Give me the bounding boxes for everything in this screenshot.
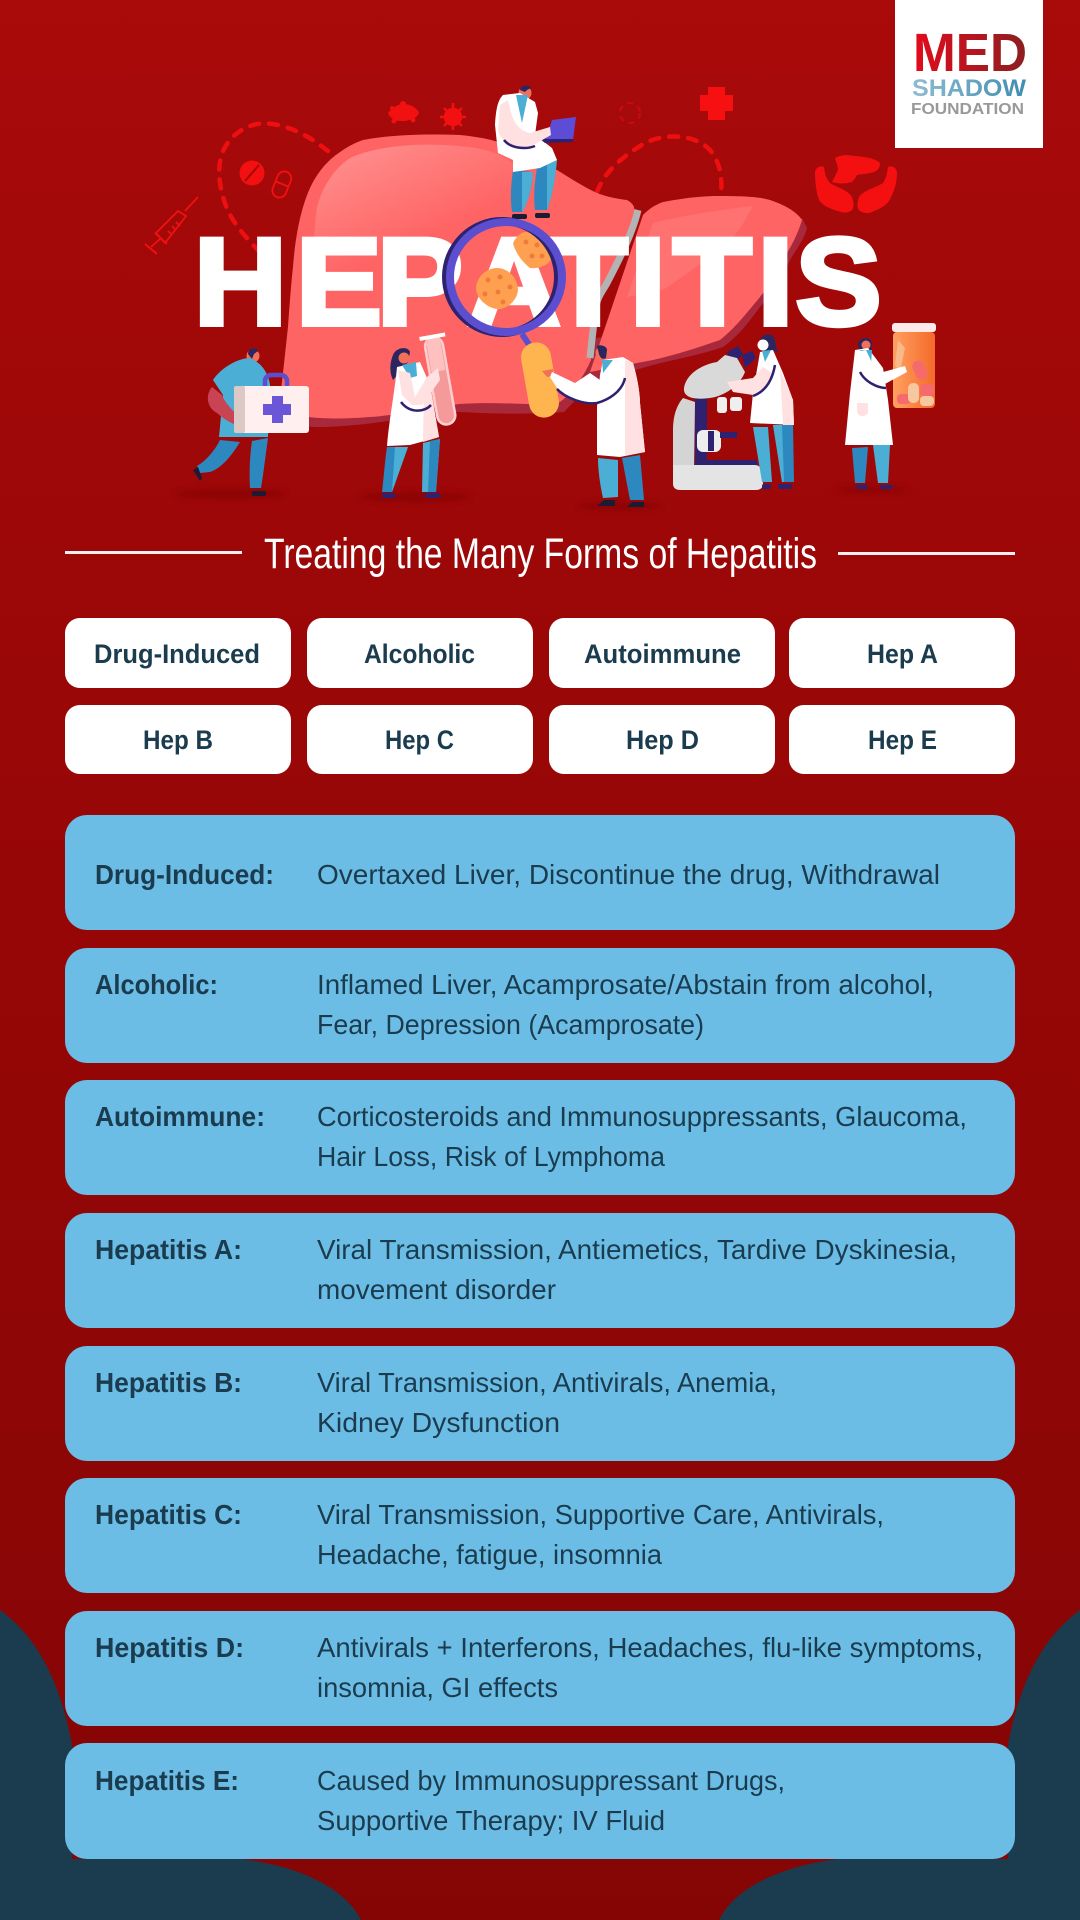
tag: Autoimmune	[549, 618, 775, 688]
panel: Alcoholic	[65, 948, 1015, 1063]
floor shadow	[360, 492, 470, 502]
arm	[673, 398, 695, 470]
liver left lobe	[280, 135, 635, 418]
panel: Hepatitis E: Supportive Therapy; IV Fluid	[317, 1805, 665, 1836]
figure: doctor at microscope	[727, 334, 794, 489]
liver seam	[590, 210, 638, 358]
panel: Drug-Induced: Drug-Induced:	[95, 859, 274, 890]
base	[673, 465, 763, 490]
coat	[387, 362, 439, 446]
panel: Hepatitis A: Hepatitis A:	[95, 1234, 242, 1265]
trousers	[852, 445, 890, 483]
handle stem	[522, 334, 530, 346]
arm back	[695, 398, 757, 466]
panel: Alcoholic: Inflamed Liver, Acamprosate/Abstain from alcohol,	[317, 969, 934, 1000]
shoes	[512, 213, 550, 219]
icon: capsule	[270, 169, 293, 200]
dashed arc right	[597, 137, 721, 198]
heading rule left	[65, 551, 242, 554]
coat	[495, 93, 557, 172]
panel: Hepatitis D: Hepatitis D:	[95, 1632, 244, 1663]
tag: Hep C	[307, 705, 533, 774]
virus cell upper	[513, 232, 552, 268]
panel: Hepatitis D	[65, 1611, 1015, 1726]
panel: Hepatitis C	[65, 1478, 1015, 1593]
laptop	[540, 117, 576, 143]
panel: Hepatitis E: Caused by Immunosuppressant Drugs,	[317, 1765, 785, 1796]
tag grid	[65, 618, 1015, 774]
icon: virus blob	[388, 101, 419, 124]
arm	[856, 350, 907, 388]
collar	[516, 95, 528, 123]
head and hair	[758, 334, 778, 352]
tag: Drug-Induced: Drug-Induced	[94, 639, 260, 669]
figure: doctor with test tube	[360, 332, 470, 502]
shoes	[193, 467, 266, 496]
panel: Hepatitis B: Viral Transmission, Antivirals, Anemia,	[317, 1367, 777, 1398]
arm	[398, 368, 440, 411]
arm	[208, 387, 252, 428]
tag: Hep A: Hep A	[867, 639, 938, 669]
logo: MedShadow Foundation: FOUNDATION	[911, 101, 1024, 118]
icon: tablet	[240, 160, 264, 186]
panel: Hepatitis A: movement disorder	[317, 1274, 556, 1305]
panel: Hepatitis D: Antivirals + Interferons, Headaches, flu-like symptoms,	[317, 1632, 983, 1663]
collar	[762, 350, 771, 362]
panel: Hepatitis A: Viral Transmission, Antiemetics, Tardive Dyskinesia,	[317, 1234, 957, 1265]
tag: Hep E: Hep E	[868, 725, 937, 755]
coat side shade	[423, 385, 439, 442]
lens ring	[450, 222, 562, 332]
trousers	[598, 455, 644, 500]
hand	[542, 369, 553, 377]
panel: Hepatitis C: Viral Transmission, Supportive Care, Antivirals,	[317, 1499, 884, 1530]
logo: MedShadow Foundation: SHADOW	[912, 75, 1026, 102]
panel: Hepatitis B: Kidney Dysfunction	[317, 1407, 560, 1438]
trousers	[382, 439, 440, 492]
kit box	[234, 386, 309, 433]
icon: syringe	[145, 197, 198, 254]
icon: hands holding liver	[815, 155, 897, 213]
panel: Drug-Induced	[65, 815, 1015, 930]
head and hair	[390, 348, 410, 380]
shoes	[762, 484, 792, 489]
panel: Hepatitis E	[65, 1743, 1015, 1859]
corner shape: bottom right	[719, 1610, 1080, 1920]
icon: virus spiked	[440, 103, 466, 130]
panel: Hepatitis D: insomnia, GI effects	[317, 1672, 558, 1703]
tag: Hep A	[789, 618, 1015, 688]
kit handle	[265, 375, 287, 393]
lens inner ring	[446, 221, 558, 333]
panel: Hepatitis C: Headache, fatigue, insomnia	[317, 1539, 662, 1570]
collar	[860, 350, 872, 365]
heading rule right	[838, 552, 1015, 555]
kit cross	[263, 396, 291, 423]
icon: red cross	[700, 87, 733, 120]
coat	[845, 348, 893, 445]
shoes	[856, 485, 893, 489]
arm	[498, 100, 551, 148]
head	[596, 345, 608, 360]
head	[246, 348, 260, 362]
floor shadow	[836, 487, 908, 493]
shoes	[597, 500, 644, 507]
corner shape: bottom left	[0, 1610, 361, 1920]
tag: Drug-Induced	[65, 618, 291, 688]
floor shadow	[578, 502, 662, 510]
tag: Hep D: Hep D	[626, 725, 699, 755]
collar	[402, 362, 417, 378]
figure: doctor with pill bottle	[836, 323, 936, 493]
collar	[602, 360, 613, 373]
tag: Hep B	[65, 705, 291, 774]
figure: doctor holding magnifier	[542, 345, 662, 510]
trousers	[511, 160, 557, 212]
knob	[697, 430, 737, 452]
right lobe highlight	[627, 206, 753, 297]
floor shadow	[175, 489, 285, 499]
test tube	[419, 332, 461, 427]
magnifying glass	[446, 221, 562, 420]
liver right lobe	[590, 196, 802, 372]
arm	[727, 365, 775, 396]
coat shade	[625, 360, 645, 456]
head	[858, 338, 872, 352]
panel: Hepatitis A	[65, 1213, 1015, 1328]
head	[684, 355, 745, 399]
pocket	[857, 403, 868, 416]
tag: Hep E	[789, 705, 1015, 774]
icon: dashed circle	[620, 103, 640, 123]
panel: Autoimmune: Autoimmune:	[95, 1101, 265, 1132]
panel: Hepatitis C: Hepatitis C:	[95, 1499, 242, 1530]
left lobe highlight	[312, 145, 555, 360]
coat	[597, 357, 645, 457]
microscope	[673, 346, 763, 490]
logo: MedShadow Foundation	[895, 0, 1043, 148]
arm	[550, 372, 625, 403]
objective	[717, 397, 742, 413]
tag: Hep B: Hep B	[143, 725, 213, 755]
panel: Hepatitis B: Hepatitis B:	[95, 1367, 242, 1398]
shirt	[213, 358, 270, 437]
tag: Alcoholic	[307, 618, 533, 688]
panel: Alcoholic: Fear, Depression (Acamprosate)	[317, 1009, 704, 1040]
decorative medical icons	[145, 87, 897, 254]
tag: Alcoholic: Alcoholic	[364, 639, 475, 669]
illustration: liver	[280, 135, 807, 427]
panel: Hepatitis E: Hepatitis E:	[95, 1765, 239, 1796]
panel: Drug-Induced: Overtaxed Liver, Discontinue the drug, Withdrawal	[317, 859, 940, 890]
panel: Autoimmune	[65, 1080, 1015, 1195]
tag: Hep D	[549, 705, 775, 774]
trousers	[197, 438, 268, 488]
virus cell lower	[476, 268, 518, 309]
handle grip	[519, 340, 561, 420]
title: HEPATITIS: HEPATITIS	[194, 212, 882, 351]
dashed arc left	[219, 123, 340, 252]
panel: Alcoholic: Alcoholic:	[95, 969, 218, 1000]
figure: nurse with medical kit	[175, 348, 309, 499]
eyepieces	[727, 346, 756, 368]
figure: doctor with laptop	[495, 86, 576, 219]
panel: Hepatitis B	[65, 1346, 1015, 1461]
logo: MedShadow Foundation: MED	[913, 23, 1027, 83]
shoes	[382, 493, 440, 498]
section heading: Treating the Many Forms of Hepatitis	[264, 530, 817, 578]
panel: Autoimmune: Hair Loss, Risk of Lymphoma	[317, 1141, 665, 1172]
head	[518, 86, 532, 100]
coat shade	[780, 370, 794, 425]
pill bottle	[892, 323, 936, 408]
tag: Hep C: Hep C	[385, 725, 454, 755]
trousers	[753, 425, 794, 482]
liver shadow edge	[280, 218, 807, 427]
coat	[750, 350, 794, 425]
tag: Autoimmune: Autoimmune	[584, 639, 741, 669]
panel: Autoimmune: Corticosteroids and Immunosuppressants, Glaucoma,	[317, 1101, 967, 1132]
